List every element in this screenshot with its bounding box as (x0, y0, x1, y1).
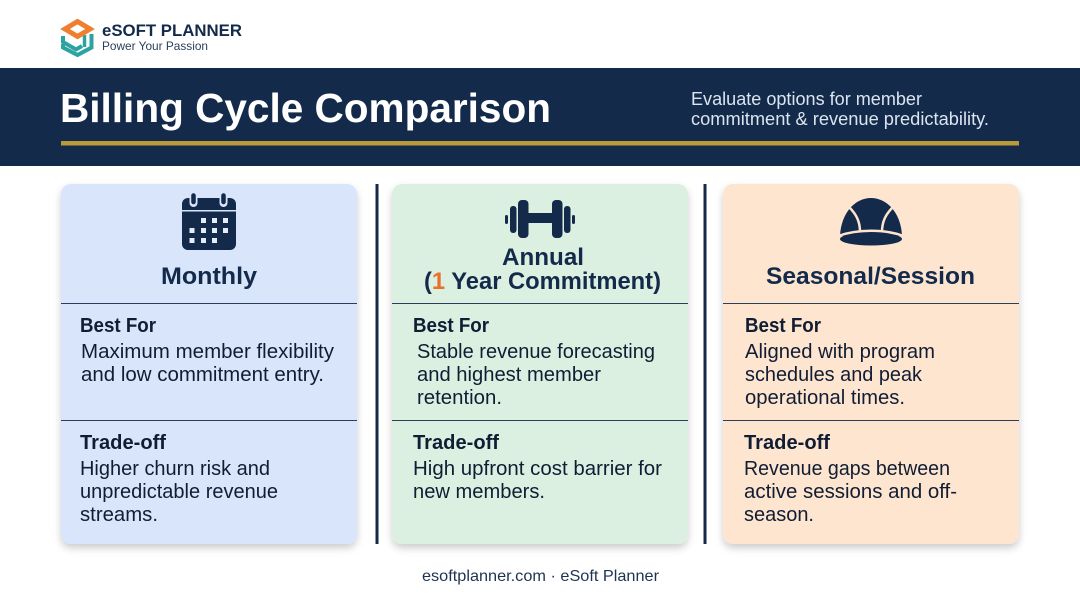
best for: seasonal: schedules and peak (745, 363, 923, 386)
icon: logo cube (63, 22, 92, 55)
trade-off: monthly (80, 432, 278, 526)
panel: seasonal (723, 184, 1019, 544)
header banner: commitment & revenue predictability. (691, 109, 989, 129)
title: Billing Cycle Comparison (60, 85, 551, 131)
logo tagline: Power Your Passion (102, 39, 208, 53)
best for: seasonal (745, 315, 935, 409)
best for: seasonal: operational times. (745, 386, 905, 409)
panel: annual (392, 184, 688, 544)
best for: monthly: Maximum member flexibility (81, 340, 335, 363)
best for: seasonal: Best For (745, 315, 821, 337)
heading: annual: Annual (502, 244, 584, 271)
heading: monthly: Monthly (161, 263, 258, 290)
footer: esoftplanner.com · eSoft Planner (422, 568, 660, 585)
heading: seasonal: Seasonal/Session (766, 263, 975, 290)
header banner (0, 68, 1080, 166)
trade-off: monthly: unpredictable revenue (80, 480, 278, 503)
heading: annual: (1 Year Commitment) (424, 268, 661, 295)
trade-off: annual: new members. (413, 480, 545, 503)
best for: monthly (80, 315, 335, 386)
trade-off: seasonal: season. (744, 503, 814, 526)
icon: cap dome (838, 198, 904, 246)
trade-off: seasonal: Trade-off (744, 432, 830, 454)
logo name: eSOFT PLANNER (102, 21, 242, 40)
logo (63, 21, 242, 55)
trade-off: monthly: Trade-off (80, 432, 166, 454)
trade-off: seasonal: active sessions and off- (744, 480, 957, 503)
trade-off: monthly: streams. (80, 503, 158, 526)
best for: annual: Stable revenue forecasting (417, 340, 655, 363)
trade-off: monthly: Higher churn risk and (80, 457, 270, 480)
best for: annual: and highest member (417, 363, 601, 386)
best for: annual (413, 315, 655, 409)
best for: monthly: and low commitment entry. (81, 363, 324, 386)
trade-off: annual (413, 432, 662, 503)
trade-off: annual: High upfront cost barrier for (413, 457, 662, 480)
best for: annual: Best For (413, 315, 489, 337)
best for: monthly: Best For (80, 315, 156, 337)
subtitle: Evaluate options for member (691, 89, 922, 109)
panel: monthly (61, 184, 357, 544)
icon: calendar (182, 195, 236, 250)
trade-off: annual: Trade-off (413, 432, 499, 454)
best for: annual: retention. (417, 386, 502, 409)
icon: dumbbell (505, 200, 575, 238)
best for: seasonal: Aligned with program (745, 340, 935, 363)
trade-off: seasonal (744, 432, 957, 526)
heading: annual (424, 244, 661, 295)
trade-off: seasonal: Revenue gaps between (744, 457, 950, 480)
